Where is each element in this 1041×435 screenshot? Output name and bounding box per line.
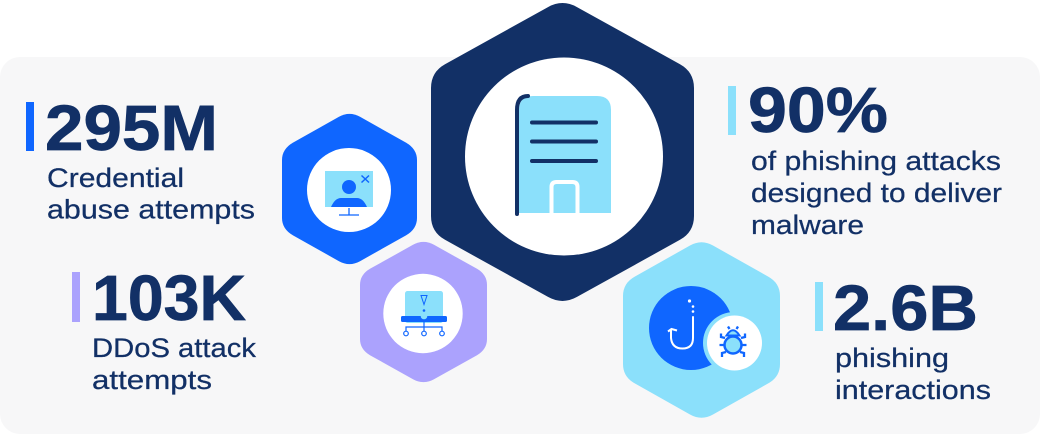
hexagon: purple DDoS — [360, 242, 487, 382]
stat: 103K DDoS: 103K — [92, 262, 246, 334]
stat: 2.6B phishing interactions: phishing — [835, 343, 949, 373]
hexagon: blue credential — [282, 114, 417, 264]
stat: 295M credential abuse: 295M — [45, 92, 218, 164]
icon: bug — [720, 326, 746, 357]
stat: 103K DDoS: attempts — [92, 365, 212, 395]
icon: document — [517, 96, 611, 214]
stat: 103K DDoS — [72, 262, 257, 395]
stat: 90% phishing malware: 90% — [748, 74, 888, 146]
stat: 295M credential abuse: abuse attempts — [47, 194, 255, 224]
icon: laptop alert network — [401, 291, 447, 336]
stat: 103K DDoS: DDoS attack — [92, 333, 257, 363]
stat: 90% phishing malware — [728, 74, 1002, 240]
stat: 295M credential abuse — [26, 92, 255, 224]
stat: 90% phishing malware: designed to deliver — [751, 178, 1002, 208]
stat: 90% phishing malware: malware — [751, 210, 864, 240]
icon: fishing hook — [649, 286, 733, 370]
stat: 2.6B phishing interactions — [815, 272, 991, 405]
icon: monitor with user — [325, 171, 373, 215]
hexagon: navy document — [431, 3, 694, 301]
stat: 90% phishing malware: of phishing attacks — [751, 146, 1001, 176]
stat: 295M credential abuse: Credential — [47, 163, 184, 193]
stat: 2.6B phishing interactions: interactions — [835, 375, 991, 405]
stat: 2.6B phishing interactions: 2.6B — [833, 272, 978, 344]
hexagon: light blue phishing — [623, 242, 780, 418]
